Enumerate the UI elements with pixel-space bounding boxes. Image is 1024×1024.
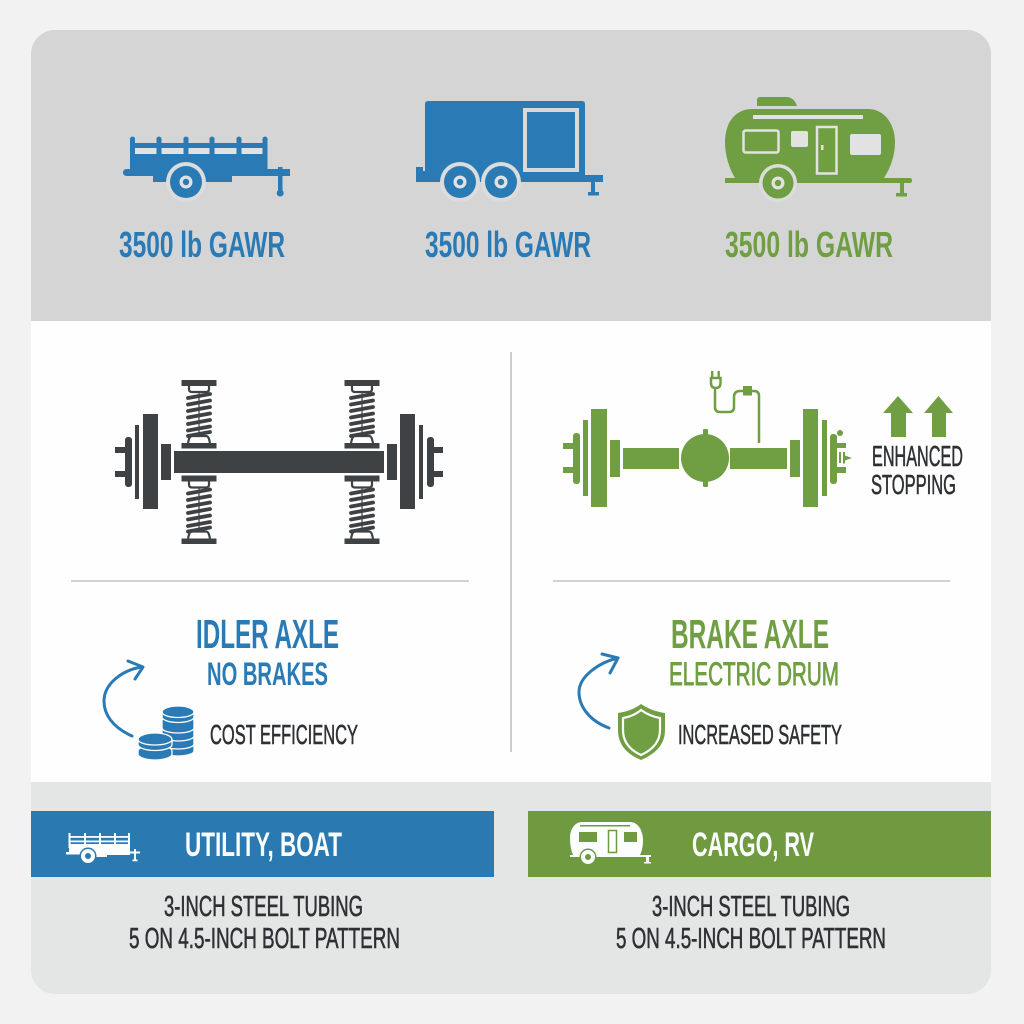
label: enhanced stopping: STOPPING xyxy=(871,469,956,500)
label: increased safety: INCREASED SAFETY xyxy=(678,719,842,750)
text block: brake specs xyxy=(616,891,886,955)
icon: coin stacks xyxy=(138,706,194,760)
icon: enhanced stopping up arrows xyxy=(883,396,953,437)
label: utility rating: 3500 lb GAWR xyxy=(119,224,285,265)
text block: brake specs: 5 ON 4.5-INCH BOLT PATTERN xyxy=(616,923,886,955)
label: cargo rv: CARGO, RV xyxy=(692,826,814,864)
label: cost efficiency: COST EFFICIENCY xyxy=(210,719,358,750)
arrow: brake curved xyxy=(579,654,618,728)
text block: idler specs: 5 ON 4.5-INCH BOLT PATTERN xyxy=(129,923,400,955)
heading: idler axle xyxy=(196,611,339,692)
heading: brake axle: BRAKE AXLE xyxy=(671,611,829,657)
panel: utility banner xyxy=(31,811,494,877)
heading: brake axle: ELECTRIC DRUM xyxy=(669,656,839,692)
icon: cargo trailer xyxy=(416,101,603,202)
arrow: idler curved xyxy=(104,661,143,736)
text block: idler specs: 3-INCH STEEL TUBING xyxy=(164,891,363,923)
icon: mini camper xyxy=(570,822,651,866)
icon: safety shield xyxy=(618,704,665,760)
panel: cargo banner xyxy=(528,811,991,877)
icon: RV camper xyxy=(725,97,912,202)
icon: brake axle xyxy=(563,371,852,507)
icon: idler axle xyxy=(115,380,443,544)
heading: idler axle: IDLER AXLE xyxy=(196,611,339,657)
label: enhanced stopping xyxy=(871,441,963,500)
label: RV rating: 3500 lb GAWR xyxy=(725,224,893,265)
heading: idler axle: NO BRAKES xyxy=(207,656,328,692)
label: utility boat: UTILITY, BOAT xyxy=(185,826,342,864)
text block: idler specs xyxy=(129,891,400,955)
icon: utility trailer xyxy=(123,136,290,202)
text block: brake specs: 3-INCH STEEL TUBING xyxy=(652,891,850,923)
icon: mini utility trailer xyxy=(66,833,140,864)
heading: brake axle xyxy=(669,611,839,692)
label: cargo rating: 3500 lb GAWR xyxy=(425,224,591,265)
